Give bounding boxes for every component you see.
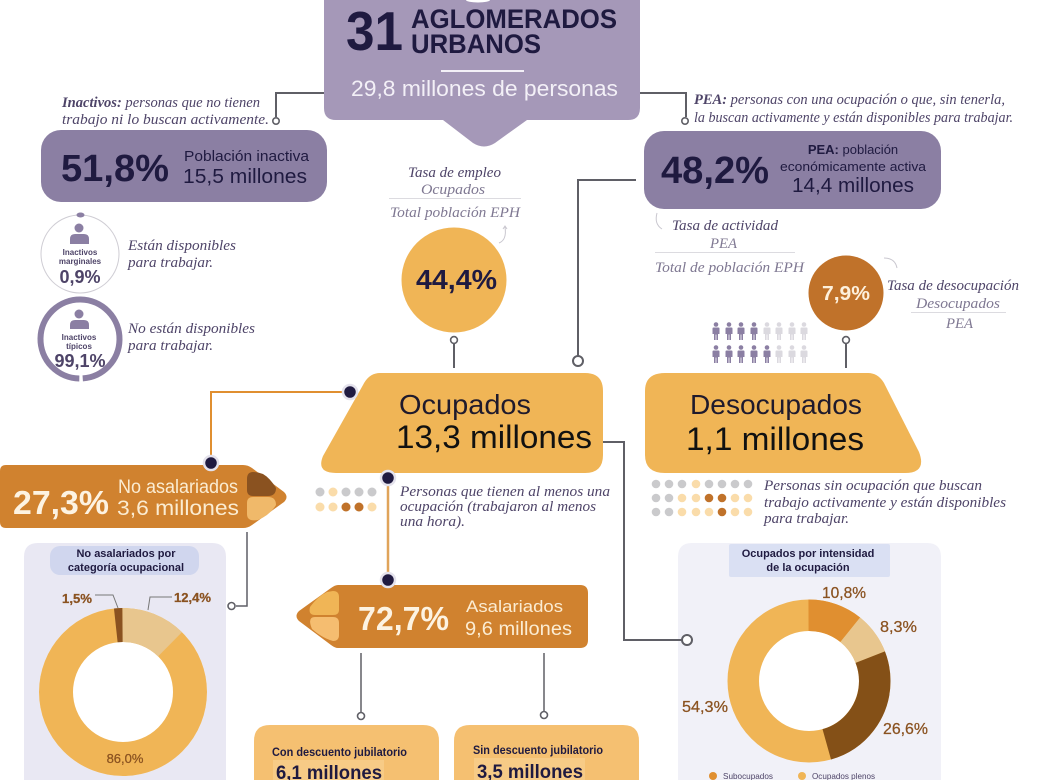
connector: no asalariados to donut bbox=[228, 532, 247, 610]
badge: inactivos marginales: Inactivos bbox=[63, 248, 98, 257]
formula: tasa de desocupacion: PEA bbox=[945, 316, 974, 332]
panel: ocupados por intensidad donut chart: de la ocupación bbox=[766, 562, 850, 574]
panel: PEA bbox=[644, 131, 941, 209]
text: no disponibles bbox=[127, 321, 255, 354]
text: disponibles bbox=[127, 238, 236, 271]
text: definition of ocupados: una hora). bbox=[400, 514, 465, 530]
header callout: 31 aglomerados urbanos: AGLOMERADOS bbox=[411, 4, 617, 34]
formula: tasa de empleo: Total población EPH bbox=[390, 205, 521, 221]
formula: tasa de desocupacion bbox=[884, 258, 1019, 332]
circle: 44,4% bbox=[402, 228, 506, 332]
pencil: asalariados: 72,7% bbox=[358, 600, 449, 637]
formula: tasa de empleo: Tasa de empleo bbox=[408, 165, 501, 181]
circle: 44,4%: 44,4% bbox=[416, 264, 497, 295]
pencil: no asalariados: No asalariados bbox=[118, 477, 238, 498]
connector: 44,4% to ocupados bbox=[451, 337, 457, 368]
badge: inactivos tipicos: Inactivos bbox=[62, 333, 97, 342]
text: disponibles: Están disponibles bbox=[127, 238, 236, 254]
circle: 7,9% bbox=[808, 256, 884, 330]
connector: ocupados to no asalariados bbox=[211, 392, 344, 458]
panel: con descuento jubilatorio: Con descuento jubilatorio bbox=[272, 747, 407, 759]
panel: ocupados por intensidad donut chart: 54,3% bbox=[682, 699, 728, 716]
formula: tasa de desocupacion: Tasa de desocupación bbox=[887, 278, 1019, 294]
panel: ocupados: Ocupados bbox=[399, 389, 531, 420]
panel: PEA: 14,4 millones bbox=[792, 175, 914, 197]
text: definition of ocupados bbox=[399, 484, 610, 530]
panel: PEA: PEA: población bbox=[808, 142, 898, 157]
text: definition of desocupados: para trabajar. bbox=[763, 511, 849, 527]
header callout: 31 aglomerados urbanos: 29,8 millones de personas bbox=[351, 76, 618, 101]
panel: poblacion inactiva: 15,5 millones bbox=[183, 166, 307, 188]
panel: ocupados por intensidad donut chart: Ocupados por intensidad bbox=[742, 548, 874, 560]
connector: asalariados to con descuento bbox=[358, 653, 364, 720]
panel: no asalariados donut chart: No asalariados por bbox=[76, 548, 176, 560]
formula: tasa de actividad: Tasa de actividad bbox=[672, 218, 779, 234]
connector: ocupados to asalariados bbox=[387, 484, 389, 575]
panel: no asalariados donut chart: categoría ocupacional bbox=[68, 562, 184, 574]
text: definition of inactivos bbox=[61, 95, 269, 128]
panel: no asalariados donut chart bbox=[24, 543, 226, 780]
text: definition of PEA bbox=[694, 92, 1013, 126]
panel: desocupados: 1,1 millones bbox=[686, 421, 864, 457]
panel: no asalariados donut chart: 86,0% bbox=[107, 751, 144, 766]
pencil: asalariados bbox=[296, 585, 588, 648]
panel: desocupados: Desocupados bbox=[690, 389, 862, 420]
panel: no asalariados donut chart: 1,5% bbox=[62, 591, 92, 606]
pencil: no asalariados bbox=[0, 465, 286, 528]
connector: 7,9% to desocupados bbox=[843, 337, 849, 368]
text: definition of ocupados: ocupación (trabajaron al menos bbox=[400, 499, 596, 515]
connector: header to inactivos bbox=[273, 93, 324, 124]
formula: tasa de actividad bbox=[655, 213, 805, 276]
text: no disponibles: para trabajar. bbox=[127, 338, 213, 354]
formula: tasa de actividad: PEA bbox=[709, 236, 738, 252]
panel: no asalariados donut chart: 12,4% bbox=[174, 590, 211, 605]
icon row: people pictogram bbox=[712, 322, 808, 363]
formula: tasa de desocupacion: Desocupados bbox=[915, 296, 1000, 312]
formula: tasa de actividad: Total de población EPH bbox=[655, 260, 805, 276]
header callout: 31 aglomerados urbanos: 31 bbox=[346, 0, 403, 62]
pencil: asalariados: Asalariados bbox=[466, 597, 563, 616]
header callout: 31 aglomerados urbanos: URBANOS bbox=[411, 29, 541, 59]
panel: sin descuento jubilatorio: Sin descuento jubilatorio bbox=[473, 745, 603, 757]
connector nodes: navy dots bbox=[204, 385, 395, 587]
badge: inactivos tipicos bbox=[40, 299, 120, 379]
panel: ocupados por intensidad donut chart: 26,6% bbox=[883, 721, 928, 738]
panel: PEA: económicamente activa bbox=[780, 159, 927, 174]
panel: poblacion inactiva bbox=[41, 130, 327, 202]
panel: ocupados por intensidad donut chart: 8,3% bbox=[880, 619, 917, 636]
pencil: no asalariados: 3,6 millones bbox=[117, 497, 239, 520]
text: definition of inactivos: trabajo ni lo buscan activamente. bbox=[62, 112, 269, 128]
connector: header to PEA bbox=[640, 93, 688, 124]
text: definition of ocupados: Personas que tienen al menos una bbox=[399, 484, 610, 500]
badge: inactivos marginales bbox=[41, 212, 119, 293]
panel: ocupados bbox=[321, 373, 603, 473]
badge: inactivos tipicos: típicos bbox=[66, 342, 92, 351]
panel: ocupados por intensidad donut chart bbox=[678, 543, 941, 780]
panel: PEA: 48,2% bbox=[661, 150, 769, 192]
text: definition of desocupados bbox=[763, 478, 1006, 527]
circle: 7,9%: 7,9% bbox=[822, 283, 870, 305]
text: disponibles: para trabajar. bbox=[127, 255, 213, 271]
connector: ocupados to donut bbox=[603, 442, 692, 645]
pencil: no asalariados: 27,3% bbox=[13, 484, 109, 521]
pencil: asalariados: 9,6 millones bbox=[465, 619, 572, 640]
text: definition of inactivos: Inactivos: personas que no tienen bbox=[61, 95, 260, 111]
text: no disponibles: No están disponibles bbox=[127, 321, 255, 337]
text: definition of PEA: la buscan activamente y están disponibles para trabajar. bbox=[694, 110, 1013, 126]
panel: desocupados bbox=[645, 373, 921, 473]
badge: inactivos marginales: 0,9% bbox=[59, 267, 101, 287]
dots: ocupados proportion bbox=[316, 488, 376, 512]
panel: poblacion inactiva: 51,8% bbox=[61, 148, 169, 190]
text: definition of desocupados: trabajo activamente y están disponibles bbox=[764, 495, 1006, 511]
panel: ocupados por intensidad donut chart: 10,8% bbox=[822, 585, 866, 602]
dots: desocupados proportion bbox=[652, 480, 752, 516]
connector: asalariados to sin descuento bbox=[540, 653, 548, 718]
connector: PEA to ocupados bbox=[573, 180, 636, 366]
text: definition of PEA: PEA: personas con una ocupación o que, sin tenerla, bbox=[694, 92, 1005, 108]
panel: poblacion inactiva: Población inactiva bbox=[184, 148, 310, 165]
panel: sin descuento jubilatorio bbox=[454, 725, 639, 780]
formula: tasa de empleo bbox=[389, 165, 521, 243]
text: definition of desocupados: Personas sin ocupación que buscan bbox=[763, 478, 982, 494]
formula: tasa de empleo: Ocupados bbox=[421, 182, 485, 198]
panel: ocupados: 13,3 millones bbox=[396, 419, 592, 455]
badge: inactivos marginales: marginales bbox=[59, 257, 102, 266]
badge: inactivos tipicos: 99,1% bbox=[54, 351, 106, 371]
header callout: 31 aglomerados urbanos bbox=[324, 0, 640, 146]
panel: con descuento jubilatorio bbox=[254, 725, 439, 780]
